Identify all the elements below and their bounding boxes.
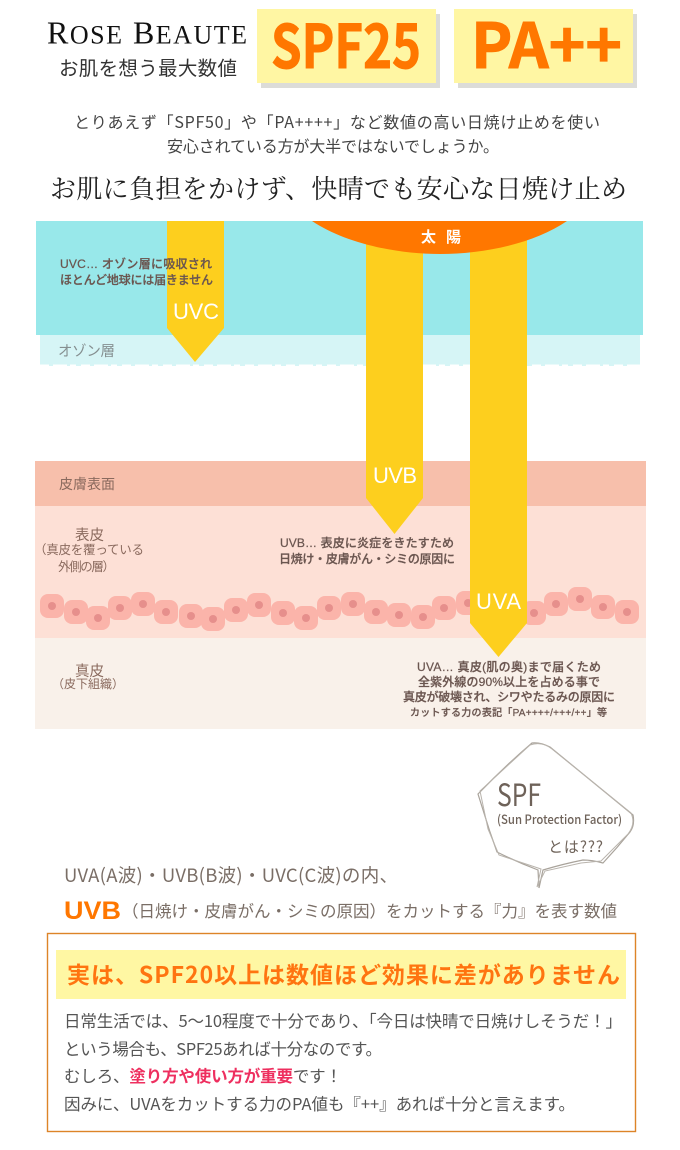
conclusion heading: 実は、SPF20以上は数値ほど効果に差がありません — [67, 956, 620, 990]
note: UVB: 日焼け・皮膚がん・シミの原因に — [279, 551, 455, 566]
speech bubble: SPF: (Sun Protection Factor) — [497, 809, 622, 828]
note: UVA — [403, 659, 615, 719]
conclusion body text — [64, 1008, 622, 1115]
dermis layer: 真皮 — [75, 663, 104, 680]
epidermis layer: 表皮 — [75, 527, 104, 544]
intro text: 安心されている方が大半ではないでしょうか。 — [167, 133, 499, 157]
conclusion body text: むしろ、塗り方や使い方が重要です！ — [64, 1063, 342, 1087]
arrow: UVB — [366, 221, 423, 534]
note: UVC — [60, 257, 213, 287]
brand header — [47, 14, 247, 81]
sun — [312, 221, 567, 254]
panel: atmosphere — [36, 221, 643, 366]
conclusion heading — [56, 950, 626, 999]
note: UVC: ほとんど地球には届きません — [60, 272, 213, 287]
arrow: UVA — [470, 221, 527, 657]
definition text: UVA(A波)・UVB(B波)・UVC(C波)の内、 — [64, 862, 398, 888]
brand tagline: お肌を想う最大数値 — [59, 52, 237, 81]
main heading: お肌に負担をかけず、快晴でも安心な日焼け止め — [50, 175, 627, 204]
arrow: UVB: UVB — [373, 463, 417, 488]
intro text — [74, 109, 600, 157]
arrow: UVA: UVA — [476, 589, 521, 614]
conclusion body text: という場合も、SPF25あれば十分なのです。 — [64, 1036, 382, 1060]
dermis layer: （皮下組織） — [52, 677, 124, 691]
arrow: UVC — [167, 221, 224, 362]
conclusion body text: 日常生活では、5～10程度で十分であり、「今日は快晴で日焼けしそうだ！」 — [64, 1008, 622, 1032]
speech bubble: SPF: SPF — [497, 770, 541, 815]
definition text: （日焼け・皮膚がん・シミの原因）をカットする『力』を表す数値 — [122, 898, 617, 922]
note: UVB: UVB… 表皮に炎症をきたすため — [280, 535, 454, 550]
note: UVA: UVA… 真皮(肌の奥)まで届くため — [417, 659, 601, 674]
definition text — [64, 862, 617, 925]
panel: skin layers — [34, 461, 646, 729]
note: UVA: 真皮が破壊され、シワやたるみの原因に — [403, 689, 615, 704]
note: UVA: 全紫外線の90%以上を占める事で — [418, 674, 600, 689]
epidermis layer: 外側の層） — [58, 560, 115, 574]
skin surface layer — [35, 461, 646, 506]
brand name: ROSE BEAUTE — [47, 14, 247, 50]
speech bubble: SPF: とは??? — [548, 836, 603, 857]
skin cells row — [40, 587, 639, 631]
epidermis layer: （真皮を覆っている — [34, 543, 144, 557]
ozone layer — [40, 335, 640, 366]
arrow: UVC: UVC — [173, 299, 219, 324]
ozone layer: オゾン層 — [58, 340, 115, 361]
sky layer — [36, 221, 643, 335]
badge: SPF25: SPF25 — [271, 0, 421, 86]
panel: conclusion box — [48, 934, 636, 1132]
skin surface layer: 皮膚表面 — [59, 476, 115, 492]
sun: 太 陽 — [421, 229, 461, 246]
conclusion body text: 因みに、UVAをカットする力のPA値も『++』あれば十分と言えます。 — [64, 1091, 575, 1115]
definition text: UVB — [64, 897, 121, 925]
note: UVB — [279, 535, 455, 566]
intro text: とりあえず「SPF50」や「PA++++」など数値の高い日焼け止めを使い — [74, 109, 600, 133]
speech bubble: SPF — [478, 743, 634, 888]
note: UVA: カットする力の表記「PA++++/+++/++」等 — [410, 706, 607, 719]
note: UVC: UVC… オゾン層に吸収され — [60, 257, 212, 271]
dermis layer — [35, 638, 646, 729]
epidermis layer — [34, 506, 646, 638]
